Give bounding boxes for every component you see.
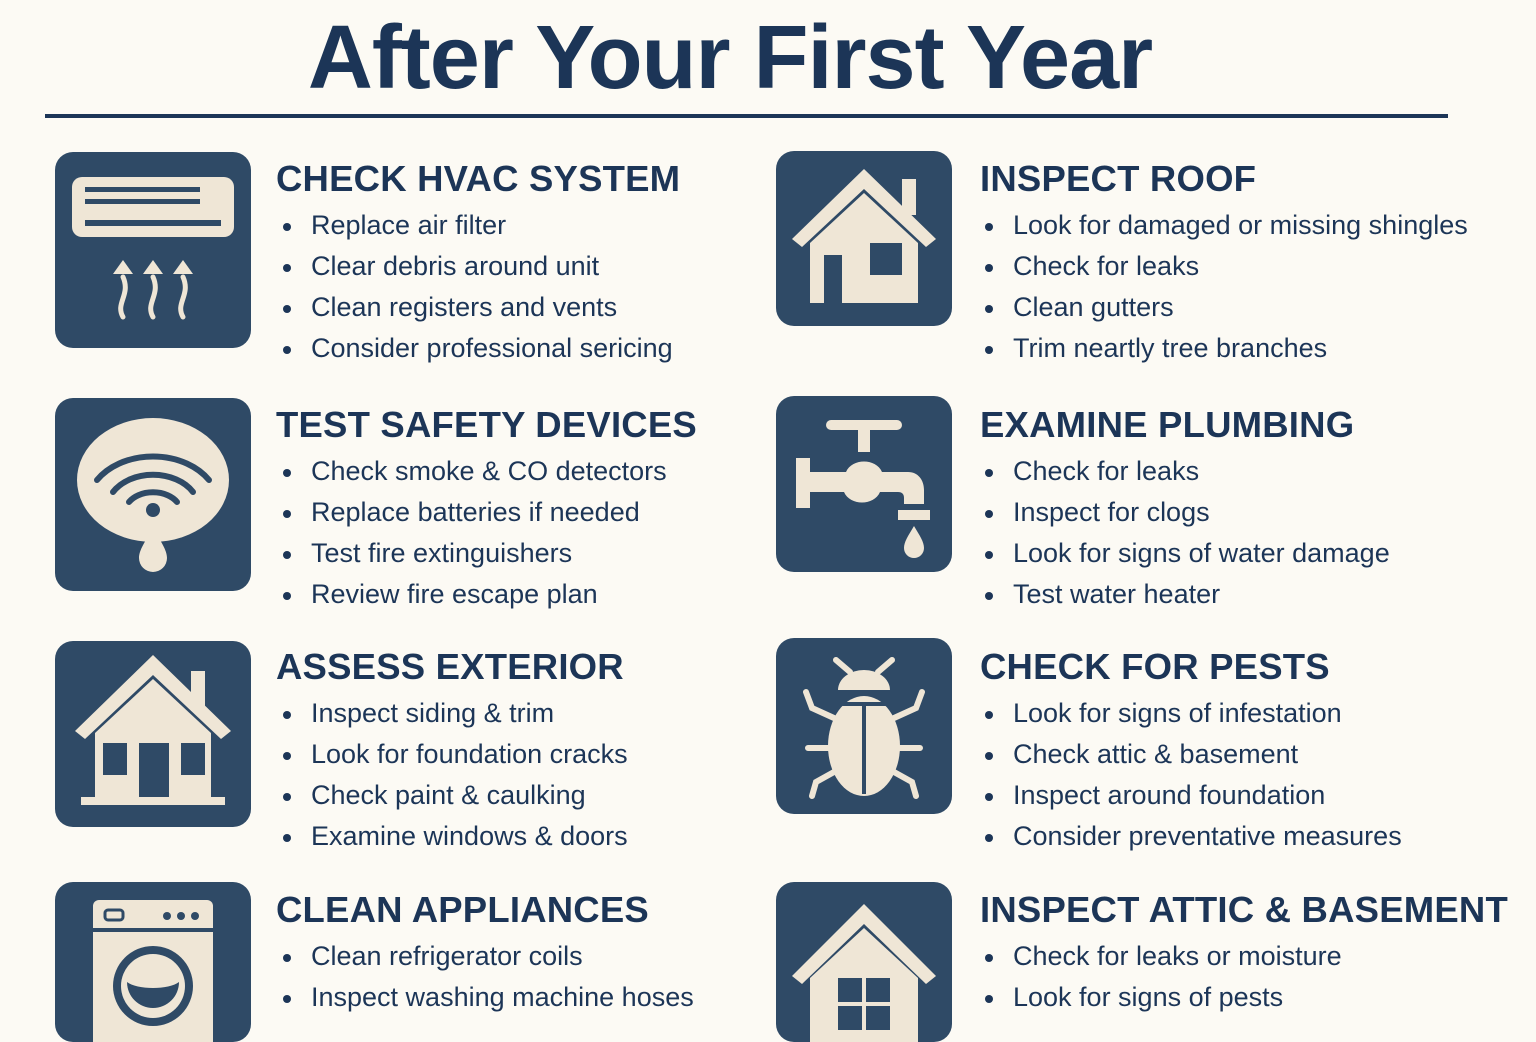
list: roof: Clean gutters bbox=[1013, 292, 1174, 322]
icon: HVAC bbox=[55, 152, 251, 348]
heading: exterior: ASSESS EXTERIOR bbox=[276, 646, 624, 687]
list: appliances bbox=[283, 941, 694, 1012]
list: plumbing: Inspect for clogs bbox=[1013, 497, 1210, 527]
list: pests bbox=[985, 698, 1402, 851]
list: roof: Look for damaged or missing shingles bbox=[1013, 210, 1468, 240]
heading: safety: TEST SAFETY DEVICES bbox=[276, 404, 697, 445]
list: plumbing bbox=[985, 456, 1390, 609]
icon: bug bbox=[776, 638, 952, 814]
list: exterior bbox=[283, 698, 628, 851]
list: safety: Replace batteries if needed bbox=[311, 497, 640, 527]
list: exterior: Look for foundation cracks bbox=[311, 739, 628, 769]
list: roof: Trim neartly tree branches bbox=[1013, 333, 1327, 363]
list: pests: Consider preventative measures bbox=[1013, 821, 1402, 851]
list: appliances: Inspect washing machine hoses bbox=[311, 982, 694, 1012]
list: plumbing: Look for signs of water damage bbox=[1013, 538, 1390, 568]
list: pests: Look for signs of infestation bbox=[1013, 698, 1342, 728]
icon: washer bbox=[55, 882, 251, 1042]
list: exterior: Examine windows & doors bbox=[311, 821, 628, 851]
list: exterior: Check paint & caulking bbox=[311, 780, 586, 810]
list: roof: Check for leaks bbox=[1013, 251, 1199, 281]
list: pests: Check attic & basement bbox=[1013, 739, 1298, 769]
heading: pests: CHECK FOR PESTS bbox=[980, 646, 1330, 687]
list: HVAC: Clear debris around unit bbox=[311, 251, 599, 281]
list: safety: Check smoke & CO detectors bbox=[311, 456, 667, 486]
list: HVAC bbox=[283, 210, 673, 363]
icon: faucet bbox=[776, 396, 952, 572]
list: plumbing: Test water heater bbox=[1013, 579, 1220, 609]
title: After Your First Year bbox=[308, 8, 1152, 108]
heading: roof: INSPECT ROOF bbox=[980, 158, 1256, 199]
list: appliances: Clean refrigerator coils bbox=[311, 941, 583, 971]
heading: HVAC: CHECK HVAC SYSTEM bbox=[276, 158, 680, 199]
list: HVAC: Clean registers and vents bbox=[311, 292, 617, 322]
heading: attic: INSPECT ATTIC & BASEMENT bbox=[980, 889, 1508, 930]
list: plumbing: Check for leaks bbox=[1013, 456, 1199, 486]
heading: appliances: CLEAN APPLIANCES bbox=[276, 889, 649, 930]
list: safety: Test fire extinguishers bbox=[311, 538, 572, 568]
list: attic: Look for signs of pests bbox=[1013, 982, 1283, 1012]
icon: smoke detector bbox=[55, 398, 251, 591]
heading: plumbing: EXAMINE PLUMBING bbox=[980, 404, 1354, 445]
icon: attic house bbox=[776, 882, 952, 1042]
list: attic bbox=[985, 941, 1342, 1012]
list: safety bbox=[283, 456, 667, 609]
list: HVAC: Consider professional sericing bbox=[311, 333, 673, 363]
list: HVAC: Replace air filter bbox=[311, 210, 506, 240]
list: attic: Check for leaks or moisture bbox=[1013, 941, 1342, 971]
list: pests: Inspect around foundation bbox=[1013, 780, 1325, 810]
icon: roof bbox=[776, 151, 952, 326]
list: safety: Review fire escape plan bbox=[311, 579, 598, 609]
icon: exterior house bbox=[55, 641, 251, 827]
list: roof bbox=[985, 210, 1468, 363]
list: exterior: Inspect siding & trim bbox=[311, 698, 554, 728]
